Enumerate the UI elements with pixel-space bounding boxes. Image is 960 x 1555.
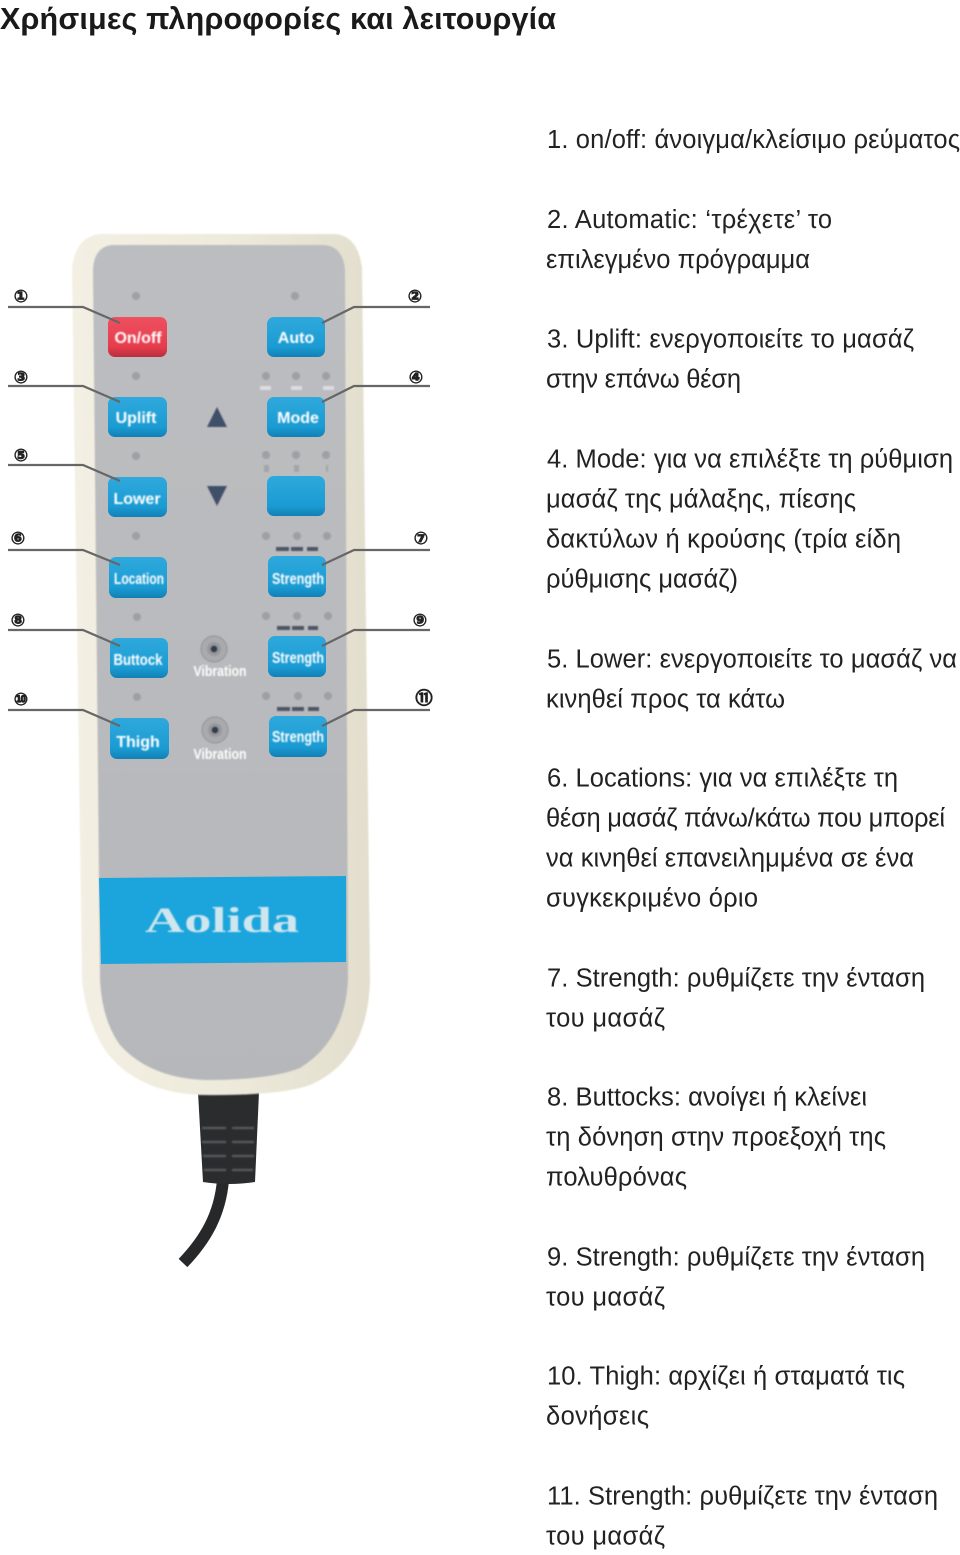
item 3: 3. Uplift: ενεργοποιείτε το μασάζ — [547, 326, 914, 354]
callout numbers: ⑦ — [414, 529, 428, 549]
button: Strength 11 — [269, 716, 327, 757]
item 10 — [546, 1362, 905, 1430]
item 7: 7. Strength: ρυθμίζετε την ένταση — [547, 964, 925, 992]
button: Auto — [267, 317, 325, 357]
indicator lights — [132, 292, 332, 701]
button: Strength 9 — [268, 636, 326, 677]
item 7: του μασάζ — [546, 1004, 665, 1032]
item 6: θέση μασάζ πάνω/κάτω που μπορεί — [546, 804, 945, 832]
button: Thigh: Thigh — [116, 734, 160, 751]
button: Mode: Mode — [277, 410, 319, 427]
item 5: 5. Lower: ενεργοποιείτε το μασάζ να — [547, 646, 957, 674]
item 9: του μασάζ — [546, 1284, 665, 1312]
callout numbers: ⑤ — [14, 446, 28, 466]
callout numbers: ② — [408, 287, 422, 307]
item 9: 9. Strength: ρυθμίζετε την ένταση — [547, 1244, 925, 1272]
callout numbers — [11, 287, 432, 710]
remote face — [93, 245, 348, 1080]
remote body — [72, 234, 370, 1095]
item 4: μασάζ της μάλαξης, πίεσης — [546, 486, 856, 514]
brand band — [99, 876, 346, 964]
item 8: 8. Buttocks: ανοίγει ή κλείνει — [547, 1084, 867, 1112]
item 7 — [546, 964, 925, 1032]
button: Location — [109, 557, 167, 598]
button: On/off: On/off — [114, 330, 162, 347]
item 4 — [546, 446, 953, 594]
item 11: 11. Strength: ρυθμίζετε την ένταση — [547, 1482, 938, 1510]
button: Location: Location — [114, 571, 164, 588]
item 5 — [546, 646, 957, 714]
arrow down — [207, 486, 227, 506]
button: Strength 9: Strength — [272, 650, 324, 667]
callout numbers: ⑧ — [11, 611, 25, 631]
callout numbers: ① — [14, 287, 28, 307]
button: Lower: Lower — [113, 491, 161, 508]
button: Lower — [108, 477, 167, 517]
mode indicator marks — [260, 386, 334, 472]
item 2 — [546, 206, 832, 274]
item 5: κινηθεί προς τα κάτω — [546, 686, 785, 714]
leader lines — [8, 307, 430, 726]
item 3: στην επάνω θέση — [546, 366, 741, 394]
item 6: συγκεκριμένο όριο — [546, 884, 758, 912]
button: Mode — [267, 397, 325, 437]
button: Strength 11: Strength — [272, 729, 324, 746]
vibration indicator top: Vibration — [194, 663, 246, 680]
arrow up — [207, 407, 227, 427]
item 6: να κινηθεί επανειλημμένα σε ένα — [546, 844, 914, 872]
item 4: 4. Mode: για να επιλέξτε τη ρύθμιση — [547, 446, 953, 474]
callout numbers: ③ — [14, 368, 28, 388]
item 2: 2. Automatic: ‘τρέχετε’ το — [547, 206, 832, 234]
button: Buttock — [110, 638, 168, 678]
item 6 — [546, 764, 945, 912]
item 9 — [546, 1244, 925, 1312]
item 8: πολυθρόνας — [546, 1164, 687, 1192]
cable strain relief — [198, 1092, 259, 1184]
button: Auto: Auto — [278, 330, 314, 347]
cable — [183, 1180, 223, 1263]
callout numbers: ⑥ — [11, 529, 25, 549]
button: Buttock: Buttock — [114, 652, 163, 669]
button: Uplift — [108, 397, 167, 437]
item 8 — [546, 1084, 886, 1192]
brand band: Aolida — [145, 900, 299, 940]
item 4: ρύθμισης μασάζ) — [546, 566, 738, 594]
item 4: δακτύλων ή κρούσης (τρία είδη — [546, 526, 901, 554]
button: Uplift: Uplift — [116, 410, 157, 427]
callout numbers: ④ — [409, 368, 423, 388]
callout numbers: ⑨ — [413, 611, 427, 631]
callout numbers: ⑪ — [416, 688, 432, 709]
button: blank — [267, 476, 325, 516]
vibration indicator bottom: Vibration — [194, 746, 246, 763]
button: Thigh — [110, 718, 169, 759]
item 2: επιλεγμένο πρόγραμμα — [546, 246, 810, 274]
item 6: 6. Locations: για να επιλέξτε τη — [547, 764, 898, 792]
item 11 — [546, 1482, 938, 1550]
item 11: του μασάζ — [546, 1522, 665, 1550]
item 1: 1. on/off: άνοιγμα/κλείσιμο ρεύματος — [547, 126, 960, 154]
item 10: 10. Thigh: αρχίζει ή σταματά τις — [547, 1362, 905, 1390]
item 3 — [546, 326, 914, 394]
item 8: τη δόνηση στην προεξοχή της — [546, 1124, 886, 1152]
button: On/off — [108, 317, 167, 357]
vibration indicator top — [194, 636, 246, 680]
button: Strength 7: Strength — [272, 571, 324, 588]
item 10: δονήσεις — [546, 1402, 649, 1430]
function list — [546, 126, 960, 1550]
button: Strength 7 — [268, 556, 326, 597]
vibration indicator bottom — [194, 717, 246, 763]
strength level ticks — [276, 549, 319, 709]
title: Χρήσιμες πληροφορίες και λειτουργία — [0, 2, 556, 36]
remote control illustration — [8, 234, 432, 1263]
callout numbers: ⑩ — [14, 690, 28, 710]
